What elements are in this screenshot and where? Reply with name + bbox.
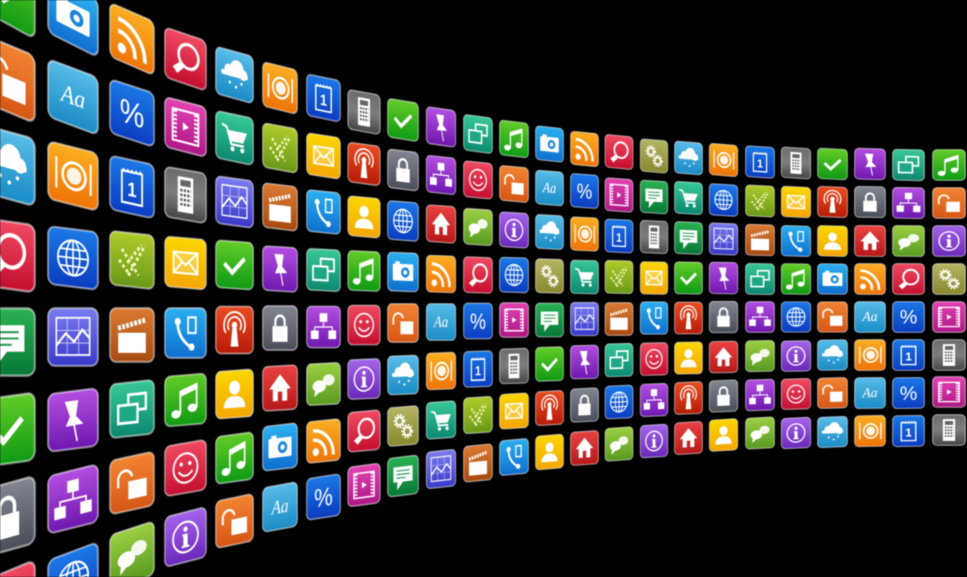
icon: bubbles bbox=[464, 208, 492, 246]
icon: user bbox=[536, 434, 563, 470]
icon: plate bbox=[571, 217, 598, 251]
icon: phone bbox=[640, 302, 668, 334]
icon: check bbox=[818, 148, 847, 180]
icon: smile bbox=[781, 378, 811, 410]
icon: music bbox=[348, 251, 380, 291]
icon: pattern bbox=[746, 185, 774, 217]
icon: globe bbox=[709, 184, 738, 216]
icon: percent bbox=[307, 474, 340, 520]
icon: calendar bbox=[746, 146, 774, 178]
icon: search bbox=[893, 264, 924, 294]
icon: unlock bbox=[818, 302, 847, 332]
icon: lock bbox=[855, 186, 885, 218]
icon: music bbox=[933, 150, 965, 180]
icon: lock bbox=[388, 149, 418, 191]
icon: film bbox=[605, 178, 633, 212]
icon: network bbox=[48, 464, 98, 534]
icon: antenna bbox=[536, 390, 563, 426]
icon: cart bbox=[571, 260, 598, 294]
icon: network bbox=[307, 306, 340, 348]
icon: calculator bbox=[165, 166, 206, 224]
icon: windows bbox=[307, 248, 340, 292]
icon: globe bbox=[500, 257, 528, 293]
icon: calculator bbox=[781, 147, 811, 179]
icon: smile bbox=[165, 439, 206, 497]
icon: pin bbox=[48, 388, 98, 452]
icon: camera bbox=[48, 0, 98, 57]
icon: rss bbox=[855, 264, 885, 294]
icon: cart bbox=[675, 181, 702, 215]
icon: chat bbox=[675, 222, 702, 254]
icon: chart bbox=[571, 302, 598, 336]
icon: cloud bbox=[675, 141, 702, 175]
icon: mail bbox=[640, 262, 668, 294]
icon: globe bbox=[781, 302, 811, 332]
icon: user bbox=[216, 369, 253, 419]
icon: chat bbox=[640, 180, 668, 214]
icon: windows bbox=[464, 114, 492, 154]
icon: plate bbox=[426, 352, 456, 390]
icon: antenna bbox=[675, 302, 702, 334]
icon: gears bbox=[933, 264, 965, 294]
icon: typography bbox=[263, 482, 297, 532]
icon: film bbox=[165, 97, 206, 157]
icon: bubbles bbox=[110, 521, 154, 577]
icon: lock bbox=[709, 301, 738, 333]
icon: calendar bbox=[893, 340, 924, 370]
icon: percent bbox=[464, 303, 492, 339]
icon: chart bbox=[216, 176, 253, 228]
icon: cloud bbox=[0, 124, 35, 206]
icon: mail bbox=[781, 186, 811, 218]
icon: camera bbox=[536, 126, 563, 162]
icon: chat bbox=[536, 303, 563, 337]
icon: info bbox=[640, 424, 668, 458]
icon: home bbox=[855, 225, 885, 257]
icon: lock bbox=[571, 388, 598, 422]
icon: calendar bbox=[893, 415, 924, 447]
icon: check bbox=[0, 0, 35, 39]
icon: pin bbox=[263, 246, 297, 292]
icon: network bbox=[746, 379, 774, 411]
icon: plate bbox=[855, 340, 885, 370]
icon: calculator bbox=[933, 415, 965, 445]
icon: phone bbox=[165, 308, 206, 358]
icon: home bbox=[675, 421, 702, 455]
icon: cart bbox=[216, 111, 253, 165]
icon: globe bbox=[48, 226, 98, 290]
icon: info bbox=[933, 226, 965, 256]
icon: antenna bbox=[348, 142, 380, 186]
icon: plate bbox=[709, 143, 738, 177]
icon: check bbox=[675, 262, 702, 294]
icon: percent bbox=[893, 377, 924, 409]
icon: gears bbox=[536, 259, 563, 293]
icon: clapper bbox=[464, 444, 492, 482]
icon: info bbox=[781, 341, 811, 371]
icon: bubbles bbox=[893, 225, 924, 257]
icon: smile bbox=[640, 343, 668, 375]
icon: antenna bbox=[675, 382, 702, 414]
icon: search bbox=[348, 410, 380, 452]
icon: typography bbox=[855, 377, 885, 409]
icon: unlock bbox=[216, 494, 253, 548]
icon: film bbox=[500, 303, 528, 337]
icon: search bbox=[165, 27, 206, 91]
icon: film bbox=[933, 302, 965, 332]
icon: pattern bbox=[605, 260, 633, 294]
icon: film bbox=[933, 377, 965, 407]
icon: film bbox=[348, 463, 380, 507]
icon: typography bbox=[426, 304, 456, 340]
icon: smile bbox=[348, 305, 380, 345]
icon: plate bbox=[855, 415, 885, 447]
icon: mail bbox=[165, 236, 206, 290]
icon: user bbox=[348, 196, 380, 238]
icon: gears bbox=[388, 406, 418, 446]
icon: mail bbox=[307, 133, 340, 179]
icon: windows bbox=[110, 380, 154, 438]
icon: globe bbox=[388, 201, 418, 241]
icon: windows bbox=[605, 343, 633, 377]
icon: bubbles bbox=[307, 362, 340, 406]
icon: unlock bbox=[933, 188, 965, 218]
icon: home bbox=[426, 205, 456, 243]
icon: chat bbox=[388, 455, 418, 497]
icon: check bbox=[216, 240, 253, 290]
icon: check bbox=[0, 393, 35, 467]
icon: windows bbox=[893, 149, 924, 181]
icon: globe bbox=[605, 385, 633, 419]
icon: camera bbox=[263, 423, 297, 471]
icon: info bbox=[165, 507, 206, 567]
icon: typography bbox=[855, 302, 885, 332]
icon: user bbox=[675, 342, 702, 374]
icon: calculator bbox=[933, 340, 965, 370]
icon: network bbox=[746, 302, 774, 332]
icon: gears bbox=[640, 139, 668, 173]
icon: info bbox=[500, 212, 528, 248]
icon: rss bbox=[307, 419, 340, 463]
icon: phone bbox=[781, 225, 811, 257]
icon: cloud bbox=[818, 340, 847, 370]
icon: network bbox=[893, 187, 924, 219]
icon: music bbox=[781, 264, 811, 294]
icon: music bbox=[500, 120, 528, 158]
icon: calculator bbox=[348, 89, 380, 135]
icon: percent bbox=[571, 173, 598, 209]
icon: unlock bbox=[0, 33, 35, 123]
icon: calendar bbox=[464, 351, 492, 387]
icon: windows bbox=[746, 263, 774, 295]
icon: mail bbox=[500, 393, 528, 429]
icon: pin bbox=[709, 262, 738, 294]
icon: lock bbox=[0, 476, 35, 558]
icon: calendar bbox=[110, 155, 154, 219]
icon: chat bbox=[0, 308, 35, 376]
icon: clapper bbox=[110, 308, 154, 362]
icon: clapper bbox=[746, 224, 774, 256]
icon: clapper bbox=[263, 183, 297, 231]
icon: typography bbox=[48, 59, 98, 135]
icon: rss bbox=[426, 255, 456, 293]
icon: chart bbox=[426, 449, 456, 489]
icon: pin bbox=[855, 148, 885, 180]
icon: search bbox=[464, 257, 492, 293]
icon: smile bbox=[464, 161, 492, 199]
icon: calculator bbox=[640, 220, 668, 254]
icon: user bbox=[818, 225, 847, 257]
icon: clapper bbox=[605, 303, 633, 335]
icon: pattern bbox=[110, 231, 154, 289]
icon: network bbox=[640, 383, 668, 417]
icon: home bbox=[571, 430, 598, 466]
icon: plate bbox=[48, 141, 98, 211]
icon: search bbox=[0, 560, 35, 577]
icon: calendar bbox=[605, 219, 633, 253]
icon: chart bbox=[709, 223, 738, 255]
icon: rss bbox=[110, 3, 154, 75]
icon: percent bbox=[893, 302, 924, 332]
icon: pattern bbox=[464, 396, 492, 434]
icon: globe bbox=[48, 542, 98, 577]
icon: cloud bbox=[818, 416, 847, 448]
icon: unlock bbox=[500, 165, 528, 203]
icon: calculator bbox=[500, 348, 528, 384]
icon: pin bbox=[426, 107, 456, 147]
icon: info bbox=[781, 417, 811, 449]
icon: unlock bbox=[818, 377, 847, 409]
icon: check bbox=[536, 347, 563, 381]
icon: cloud bbox=[388, 355, 418, 395]
icon: lock bbox=[263, 306, 297, 350]
icon: bubbles bbox=[746, 340, 774, 372]
icon: percent bbox=[110, 79, 154, 147]
icon: antenna bbox=[818, 186, 847, 218]
icon: camera bbox=[388, 252, 418, 292]
icon: home bbox=[709, 341, 738, 373]
icon: check bbox=[388, 98, 418, 142]
icon: network bbox=[426, 155, 456, 195]
icon: antenna bbox=[216, 306, 253, 354]
icon: music bbox=[165, 373, 206, 427]
icon: pattern bbox=[263, 123, 297, 173]
icon: calendar bbox=[307, 74, 340, 122]
icon: info bbox=[348, 359, 380, 399]
icon: camera bbox=[818, 264, 847, 294]
icon: user bbox=[709, 419, 738, 451]
icon: cloud bbox=[536, 214, 563, 250]
icon: bubbles bbox=[746, 417, 774, 449]
icon: cart bbox=[426, 401, 456, 439]
icon: unlock bbox=[388, 304, 418, 342]
icon: lock bbox=[709, 380, 738, 412]
icon: unlock bbox=[110, 451, 154, 515]
icon: pin bbox=[571, 345, 598, 379]
icon: chart bbox=[48, 308, 98, 366]
icon: search bbox=[605, 134, 633, 170]
icon: music bbox=[216, 432, 253, 484]
icon: bubbles bbox=[605, 427, 633, 461]
icon: phone bbox=[500, 438, 528, 476]
icon: home bbox=[263, 365, 297, 411]
icon: plate bbox=[263, 62, 297, 114]
icon: rss bbox=[571, 131, 598, 167]
icon: typography bbox=[536, 170, 563, 206]
icon: cloud bbox=[216, 46, 253, 104]
icon: search bbox=[0, 218, 35, 292]
icon: phone bbox=[307, 190, 340, 234]
